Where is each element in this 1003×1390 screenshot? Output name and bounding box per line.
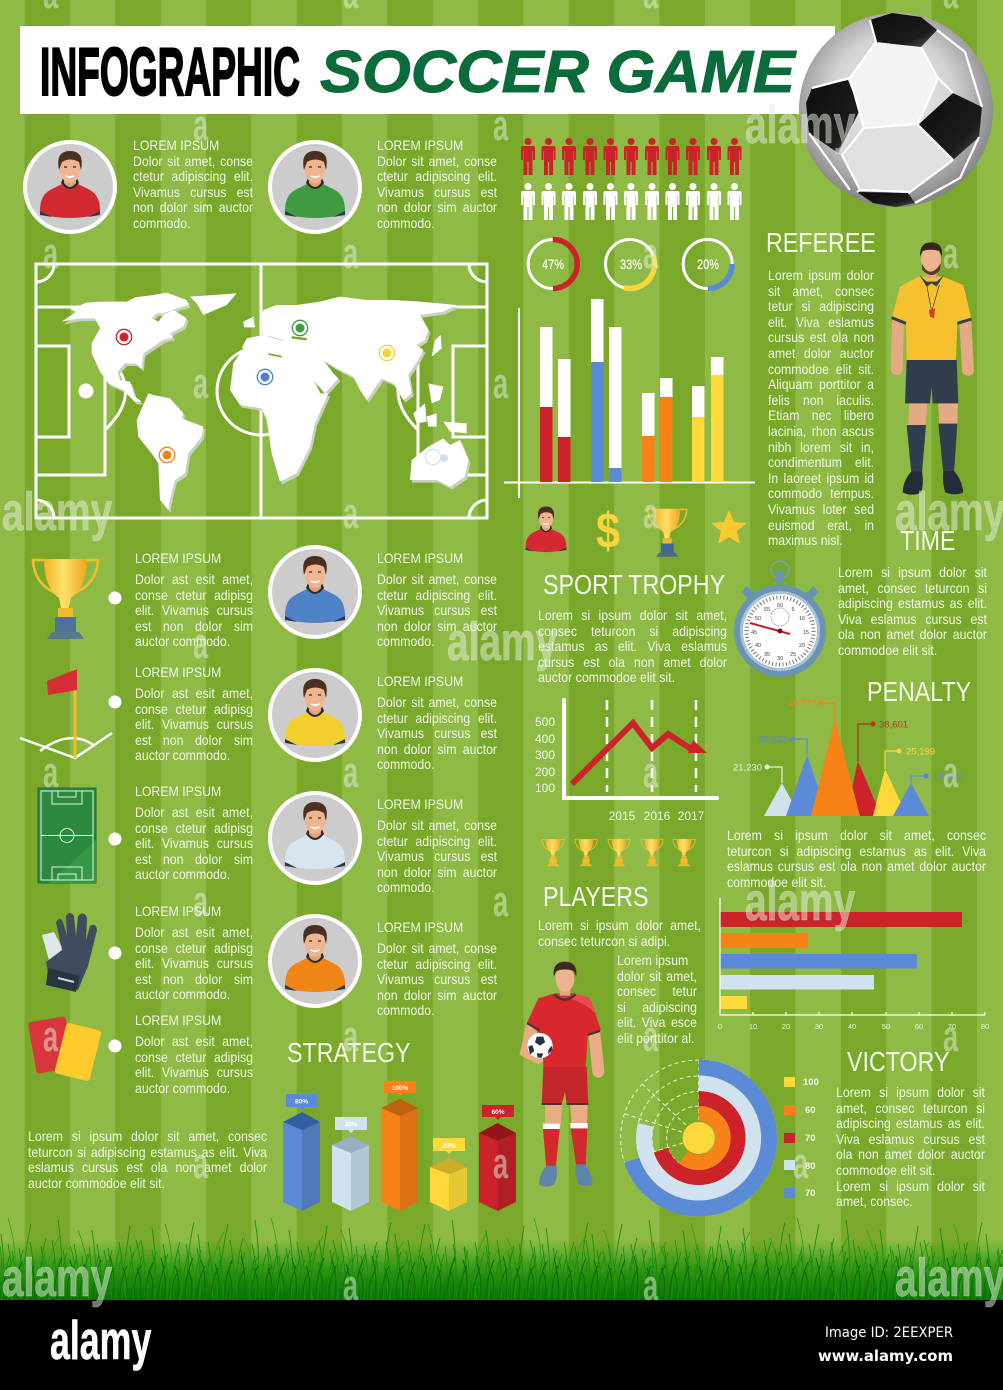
column: blue 80%: 80% <box>295 1098 308 1106</box>
text: players paragraph: consec tetur <box>617 983 697 999</box>
text: trophy item <box>135 550 253 649</box>
text: time paragraph: commodoe elit sit. <box>838 642 937 658</box>
text: trophy item: elit. Vivamus cursus <box>135 602 253 618</box>
text: glove item: Dolor ast esit amet, <box>135 924 253 940</box>
heading: time: TIME <box>900 525 956 556</box>
icon: player bust <box>526 507 566 552</box>
footer image id: Image ID: 2EEXPER <box>825 1325 953 1341</box>
radial chart <box>621 1060 819 1216</box>
watermarks: a <box>43 1011 59 1061</box>
text: pale player: commodo. <box>377 879 435 895</box>
text: penalty paragraph <box>727 827 986 890</box>
watermarks: alamy <box>895 481 1003 541</box>
text: cards item: Dolor ast esit amet, <box>135 1033 253 1049</box>
line chart <box>535 700 717 823</box>
footer url: www.alamy.com <box>818 1347 953 1365</box>
icon: stopwatch: 55 <box>764 607 770 613</box>
3D column chart <box>283 1081 516 1211</box>
text: glove item: elit. Vivamus cursus <box>135 955 253 971</box>
text: victory paragraph: Viva eslamus cursus est <box>836 1131 985 1147</box>
avatar: orange player <box>268 914 362 1008</box>
text: yellow player: non dolor sim auctor <box>377 741 497 757</box>
avatar: red player <box>23 140 117 234</box>
text: strategy paragraph: teturcon si adipiscing estamus as elit. Viva <box>28 1144 267 1160</box>
watermarks: alamy <box>895 1247 1003 1307</box>
text: referee paragraph: lacinia, rhon ascus <box>768 423 874 439</box>
text: referee paragraph: In laoreet ipsum id <box>768 470 874 486</box>
text: orange player <box>377 919 497 1018</box>
text: sport trophy paragraph: Lorem si ipsum dolor sit amet, <box>538 607 727 623</box>
text: referee paragraph: condimentum elit. <box>768 454 874 470</box>
watermarks: a <box>493 100 509 150</box>
text: trophy item: auctor commodo. <box>135 633 230 649</box>
text: yellow player: ctetur adipiscing elit. <box>377 710 497 726</box>
text: penalty paragraph: eslamus cursus est ola non amet dolor auctor <box>727 858 986 874</box>
radial chart legend: 70 <box>805 1133 816 1144</box>
heading: penalty: PENALTY <box>867 676 971 707</box>
line chart: 2016 <box>644 809 671 823</box>
horizontal bar chart: 20 <box>782 1022 790 1031</box>
text: pitch item: auctor commodo. <box>135 866 230 882</box>
text: yellow player: LOREM IPSUM <box>377 673 463 689</box>
donut: 20%: 20% <box>697 257 719 272</box>
text: referee paragraph: commodoe elit sit. <box>768 361 874 377</box>
text: red player <box>133 137 253 231</box>
icon: mini pitch <box>38 788 96 883</box>
radial chart legend: 80 <box>805 1161 816 1172</box>
penalty peak chart: 19,500 <box>933 772 962 782</box>
text: referee paragraph: commodo tempus. <box>768 485 874 501</box>
text: green player <box>377 137 497 231</box>
line chart: 2015 <box>609 809 636 823</box>
line chart: 200 <box>535 765 555 779</box>
text: pale player: non dolor sim auctor <box>377 864 497 880</box>
text: green player: Dolor sit amet, conse <box>377 153 497 169</box>
text: red player: Vivamus cursus est <box>133 184 253 200</box>
watermarks: a <box>193 1138 209 1188</box>
horizontal bar chart <box>718 898 989 1031</box>
text: referee paragraph: Lorem ipsum dolor <box>768 267 874 283</box>
text: time paragraph: Viva eslamus cursus est <box>838 611 987 627</box>
text: pitch item: Dolor ast esit amet, <box>135 804 253 820</box>
text: flag item: conse ctetur adipisg <box>135 701 253 717</box>
text: green player: LOREM IPSUM <box>377 137 463 153</box>
text: players intro: consec teturcon si adipi. <box>538 933 670 949</box>
watermarks: a <box>493 1138 509 1188</box>
penalty peak chart: 46,777 <box>788 698 817 710</box>
text: trophy item: conse ctetur adipisg <box>135 587 253 603</box>
column: blue 80% <box>283 1094 320 1211</box>
icon: stopwatch: 15 <box>803 630 809 636</box>
text: victory paragraph: amet, consec teturcon si <box>836 1100 985 1116</box>
text: green player: ctetur adipiscing elit. <box>377 168 497 184</box>
watermarks: alamy <box>447 611 557 671</box>
text: referee paragraph <box>768 267 874 548</box>
text: strategy paragraph: auctor commodoe elit sit. <box>28 1175 165 1191</box>
text: flag item: LOREM IPSUM <box>135 664 221 680</box>
watermarks: alamy <box>2 481 112 541</box>
text: strategy paragraph: eslamus cursus est ola non amet dolor <box>28 1159 267 1175</box>
icon: corner flag <box>20 669 112 758</box>
world map <box>62 293 470 513</box>
icon: stopwatch: 30 <box>777 656 783 662</box>
watermarks: a <box>343 747 359 797</box>
pitch lines with world map <box>36 264 487 518</box>
text: time paragraph: Lorem si ipsum dolor sit <box>838 564 987 580</box>
watermarks: alamy <box>2 1247 112 1307</box>
heading: victory: VICTORY <box>847 1046 949 1077</box>
text: players paragraph: elit porttitor al. <box>617 1030 694 1046</box>
text: red player: ctetur adipiscing elit. <box>133 168 253 184</box>
penalty peak chart: 25,199 <box>906 746 935 758</box>
figure: referee <box>892 242 972 495</box>
watermarks: a <box>943 747 959 797</box>
watermarks: a <box>43 747 59 797</box>
text: red player: commodo. <box>133 215 191 231</box>
icon: stopwatch: 45 <box>751 630 757 636</box>
text: referee paragraph: amet dolor auctor <box>768 345 874 361</box>
icon: dollar: $ <box>596 503 620 559</box>
text: green player: commodo. <box>377 215 435 231</box>
text: glove item: auctor commodo. <box>135 986 230 1002</box>
map pin: yellow <box>379 345 395 361</box>
watermarks: a <box>643 228 659 278</box>
text: flag item: auctor commodo. <box>135 747 230 763</box>
text: players intro <box>538 917 701 949</box>
watermarks: a <box>643 747 659 797</box>
text: sport trophy paragraph: auctor commodoe elit sit. <box>538 669 675 685</box>
icon: star <box>711 510 747 544</box>
text: sport trophy paragraph: cursus est ola non amet dolor <box>538 654 727 670</box>
watermarks: a <box>643 1260 659 1310</box>
map pin: red <box>116 329 132 345</box>
text: flag item <box>135 664 253 763</box>
text: pitch item: est non dolor sim <box>135 851 253 867</box>
column: yellow 20% <box>430 1138 467 1211</box>
text: blue player <box>377 550 497 649</box>
text: time paragraph: amet, consec teturcon si <box>838 580 987 596</box>
penalty peak chart: 38,601 <box>879 720 908 730</box>
line chart: 100 <box>535 781 555 795</box>
line chart: 2017 <box>678 809 705 823</box>
donut: 47% <box>528 240 577 288</box>
figure: player with ball <box>526 962 601 1187</box>
text: orange player: Dolor sit amet, conse <box>377 940 497 956</box>
text: yellow player: commodo. <box>377 756 435 772</box>
penalty peak chart <box>733 698 962 816</box>
text: players paragraph: dolor sit amet, <box>617 968 697 984</box>
footer band <box>0 1300 1003 1390</box>
icon: goalkeeper glove <box>42 913 97 992</box>
text: referee paragraph: Aliquam porttitor a <box>768 376 874 392</box>
watermarks: a <box>343 228 359 278</box>
text: players paragraph: Lorem ipsum <box>617 952 688 968</box>
donut: 20% <box>683 240 732 288</box>
column: orange 100%: 100% <box>392 1085 409 1092</box>
text: glove item: conse ctetur adipisg <box>135 940 253 956</box>
text: strategy paragraph: Lorem si ipsum dolor sit amet, consec <box>28 1128 267 1144</box>
text: referee paragraph: Vivamus loter sed <box>768 501 874 517</box>
text: pitch item: LOREM IPSUM <box>135 783 221 799</box>
text: glove item <box>135 903 253 1002</box>
horizontal bar chart: 70 <box>948 1022 956 1031</box>
bullet dots <box>108 592 122 1052</box>
text: victory paragraph <box>836 1084 985 1209</box>
text: players paragraph <box>617 952 697 1046</box>
radial chart legend <box>784 1077 819 1199</box>
map pin: orange <box>159 447 175 463</box>
watermarks: a <box>643 1011 659 1061</box>
text: flag item: Dolor ast esit amet, <box>135 685 253 701</box>
text: yellow player: Vivamus cursus est <box>377 725 497 741</box>
watermarks: a <box>43 228 59 278</box>
heading: referee: REFEREE <box>766 227 876 258</box>
watermarks: a <box>193 100 209 150</box>
avatar: yellow player <box>268 668 362 762</box>
text: time paragraph: adipiscing estamus as elit. <box>838 595 987 611</box>
text: players intro: Lorem si ipsum dolor amet, <box>538 917 701 933</box>
horizontal bar chart: 30 <box>815 1022 823 1031</box>
small trophies row <box>542 839 695 866</box>
map pin: pale blue <box>425 449 448 465</box>
icon: trophy <box>33 559 98 639</box>
horizontal bar chart: 10 <box>749 1022 757 1031</box>
avatar: green player <box>268 140 362 234</box>
footer logo: alamy <box>50 1309 152 1371</box>
text: referee paragraph: euismod erat, in <box>768 516 874 532</box>
icon: stopwatch: 25 <box>790 652 796 658</box>
text: victory paragraph: ola non amet dolor auctor <box>836 1146 985 1162</box>
donut: 47%: 47% <box>542 257 564 272</box>
text: pitch item: elit. Vivamus cursus <box>135 835 253 851</box>
watermarks: alamy <box>745 871 855 931</box>
watermarks: a <box>493 876 509 926</box>
pictogram row: white players <box>521 183 742 220</box>
text: orange player: LOREM IPSUM <box>377 919 463 935</box>
text: orange player: Vivamus cursus est <box>377 971 497 987</box>
watermarks: a <box>943 228 959 278</box>
text: cards item: LOREM IPSUM <box>135 1012 221 1028</box>
line chart: 300 <box>535 748 555 762</box>
pictogram row: red players <box>521 138 742 175</box>
text: orange player: commodo. <box>377 1002 435 1018</box>
text: referee paragraph: nibh lorem sit in, <box>768 439 874 455</box>
icon: stopwatch: 5 <box>791 607 795 613</box>
donut: 33% <box>599 233 661 295</box>
radial chart legend: 100 <box>803 1077 819 1088</box>
text: blue player: Dolor sit amet, conse <box>377 571 497 587</box>
icon: stopwatch: 10 <box>799 616 805 622</box>
text: time paragraph <box>838 564 987 658</box>
horizontal bar chart: 40 <box>848 1022 856 1031</box>
text: sport trophy paragraph: estamus as elit. Viva eslamus <box>538 638 727 654</box>
text: referee paragraph: tetur si adipiscing <box>768 298 874 314</box>
text: blue player: LOREM IPSUM <box>377 550 463 566</box>
text: penalty paragraph: Lorem si ipsum dolor sit amet, consec <box>727 827 986 843</box>
text: flag item: elit. Vivamus cursus <box>135 716 253 732</box>
watermarks: a <box>343 488 359 538</box>
map pin: green <box>292 320 308 336</box>
icon: stopwatch: 20 <box>799 643 805 649</box>
title: INFOGRAPHIC: INFOGRAPHIC <box>40 34 300 110</box>
title banner <box>20 26 835 114</box>
line chart: 500 <box>535 715 555 729</box>
avatar: pale blue player <box>268 791 362 885</box>
penalty peak chart: 21,230 <box>733 762 762 774</box>
text: glove item: est non dolor sim <box>135 971 253 987</box>
text: blue player: non dolor sim auctor <box>377 618 497 634</box>
icon: small trophy <box>648 509 687 557</box>
heading: sport trophy: SPORT TROPHY <box>543 569 725 600</box>
text: flag item: est non dolor sim <box>135 732 253 748</box>
column: red 60%: 60% <box>491 1109 505 1116</box>
watermarks: a <box>193 618 209 668</box>
watermarks: a <box>943 1011 959 1061</box>
text: cards item: auctor commodo. <box>135 1080 230 1096</box>
text: sport trophy paragraph <box>538 607 727 685</box>
text: cards item: conse ctetur adipisg <box>135 1049 253 1065</box>
icon: stopwatch: 50 <box>755 616 761 622</box>
text: cards item: elit. Vivamus cursus <box>135 1064 253 1080</box>
watermarks: a <box>643 488 659 538</box>
text: pitch item: conse ctetur adipisg <box>135 820 253 836</box>
icon: stopwatch <box>734 561 826 677</box>
icon: soccer ball <box>799 13 993 207</box>
bar chart <box>504 299 755 498</box>
text: referee paragraph: elit. Viva eslamus <box>768 314 874 330</box>
watermarks: a <box>343 1260 359 1310</box>
text: cards item <box>135 1012 253 1096</box>
text: victory paragraph: Lorem si ipsum dolor sit <box>836 1084 985 1100</box>
watermarks: a <box>193 876 209 926</box>
text: orange player: non dolor sim auctor <box>377 987 497 1003</box>
text: trophy item: Dolor ast esit amet, <box>135 571 253 587</box>
text: pale player <box>377 796 497 895</box>
heading: strategy: STRATEGY <box>287 1037 411 1068</box>
horizontal bar chart: 80 <box>981 1022 989 1031</box>
line chart: 400 <box>535 732 555 746</box>
text: victory paragraph: Lorem si ipsum dolor sit <box>836 1178 985 1194</box>
text: red player: LOREM IPSUM <box>133 137 219 153</box>
text: penalty paragraph: teturcon si adipiscing estamus as elit. Viva <box>727 843 986 859</box>
column: yellow 20%: 20% <box>442 1142 456 1150</box>
column: pale 40%: 40% <box>344 1122 358 1128</box>
penalty peak chart: 30,633 <box>758 734 787 746</box>
text: referee paragraph: maximus nisl. <box>768 532 843 548</box>
text: red player: non dolor sim auctor <box>133 199 253 215</box>
text: blue player: ctetur adipiscing elit. <box>377 587 497 603</box>
text: players paragraph: elit. Viva esce <box>617 1014 697 1030</box>
text: blue player: commodo. <box>377 633 435 649</box>
horizontal bar chart: 60 <box>915 1022 923 1031</box>
map pin: blue <box>257 369 273 385</box>
text: pale player: Dolor sit amet, conse <box>377 817 497 833</box>
text: victory paragraph: commodoe elit sit. <box>836 1162 935 1178</box>
text: pale player: ctetur adipiscing elit. <box>377 833 497 849</box>
column: pale 40% <box>332 1117 369 1211</box>
radial chart legend: 70 <box>805 1188 816 1199</box>
heading: players: PLAYERS <box>543 881 648 912</box>
horizontal bar chart: 0 <box>718 1022 722 1031</box>
text: glove item: LOREM IPSUM <box>135 903 221 919</box>
donut: 33%: 33% <box>620 257 642 272</box>
text: yellow player: Dolor sit amet, conse <box>377 694 497 710</box>
text: green player: Vivamus cursus est <box>377 184 497 200</box>
text: green player: non dolor sim auctor <box>377 199 497 215</box>
text: players paragraph: si adipiscing <box>617 999 697 1015</box>
text: pale player: Vivamus cursus est <box>377 848 497 864</box>
icon: stopwatch: 60 <box>777 603 783 609</box>
avatar: blue player <box>268 545 362 639</box>
column: orange 100% <box>381 1081 418 1211</box>
text: pale player: LOREM IPSUM <box>377 796 463 812</box>
text: penalty paragraph: commodoe elit sit. <box>727 874 826 890</box>
text: red player: Dolor sit amet, conse <box>133 153 253 169</box>
text: referee paragraph: Etiam nec libero <box>768 407 874 423</box>
icon: penalty cards <box>28 1016 102 1082</box>
grass <box>0 1216 1003 1300</box>
text: referee paragraph: cursus est ola non <box>768 329 874 345</box>
text: trophy item: LOREM IPSUM <box>135 550 221 566</box>
icon: stopwatch: 40 <box>755 643 761 649</box>
text: blue player: Vivamus cursus est <box>377 602 497 618</box>
text: sport trophy paragraph: consec teturcon si adipiscing <box>538 623 727 639</box>
text: strategy paragraph <box>28 1128 267 1191</box>
watermarks: a <box>793 1138 809 1188</box>
text: time paragraph: ola non amet dolor auctor <box>838 626 987 642</box>
text: referee paragraph: felis non iaculis. <box>768 392 874 408</box>
title: SOCCER GAME: SOCCER GAME <box>320 39 797 105</box>
horizontal bar chart: 50 <box>882 1022 890 1031</box>
icon: stopwatch: 35 <box>764 652 770 658</box>
watermarks: a <box>193 358 209 408</box>
text: referee paragraph: sit amet, consec <box>768 283 874 299</box>
text: pitch item <box>135 783 253 882</box>
text: orange player: ctetur adipiscing elit. <box>377 956 497 972</box>
radial chart legend: 60 <box>805 1105 816 1116</box>
watermarks: alamy <box>745 94 855 154</box>
column: red 60% <box>479 1105 516 1211</box>
text: trophy item: est non dolor sim <box>135 618 253 634</box>
text: yellow player <box>377 673 497 772</box>
watermarks: a <box>493 358 509 408</box>
text: victory paragraph: adipiscing estamus as elit. <box>836 1115 985 1131</box>
text: victory paragraph: amet, consec. <box>836 1193 913 1209</box>
watermarks: a <box>343 1011 359 1061</box>
